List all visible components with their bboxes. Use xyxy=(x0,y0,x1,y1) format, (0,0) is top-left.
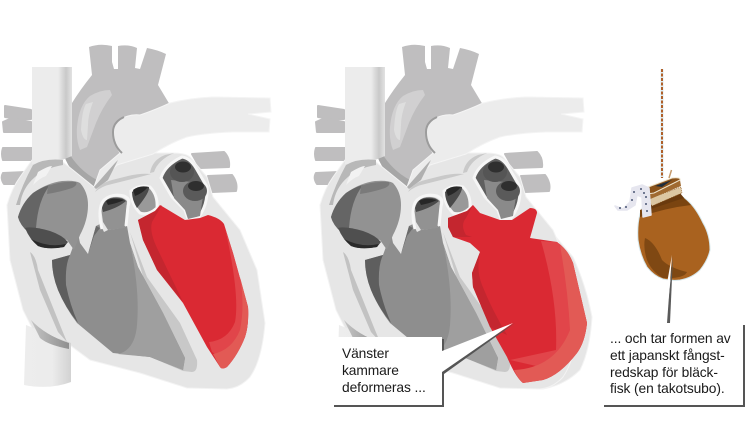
right ventricle lining xyxy=(130,232,197,372)
heart: deformed xyxy=(315,45,592,389)
pulmonary veins xyxy=(2,106,237,192)
aorta shading xyxy=(62,107,97,188)
rope xyxy=(662,69,672,178)
callout text: fisk (en takotsubo). xyxy=(610,381,725,396)
callout text: redskap för bläck- xyxy=(610,365,718,380)
callout text: ett japanskt fångst- xyxy=(610,348,725,363)
takotsubo jar xyxy=(615,178,710,280)
callout text: kammare xyxy=(342,363,399,378)
body xyxy=(7,153,265,389)
left ventricle: normal xyxy=(138,205,248,368)
heart: normal xyxy=(2,45,271,389)
callout text: ... och tar formen av xyxy=(610,331,731,346)
tentacle xyxy=(615,185,651,217)
callout text: Vänster xyxy=(342,346,389,361)
inferior vena cava xyxy=(24,325,71,387)
pulmonary valve xyxy=(100,195,129,230)
aorta xyxy=(62,45,190,188)
superior vena cava xyxy=(32,67,72,164)
pulmonary artery xyxy=(94,97,271,187)
callout: left ventricle xyxy=(332,323,515,407)
upper wall crescents xyxy=(16,160,63,205)
right ventricle xyxy=(52,224,185,370)
right atrium xyxy=(18,181,88,250)
deformed left ventricle xyxy=(448,205,587,383)
left atrium xyxy=(161,157,207,219)
callout: jar xyxy=(602,255,745,407)
callout text: deformeras ... xyxy=(342,380,426,395)
enlarged wall xyxy=(460,197,592,389)
aortic valve xyxy=(131,186,157,214)
